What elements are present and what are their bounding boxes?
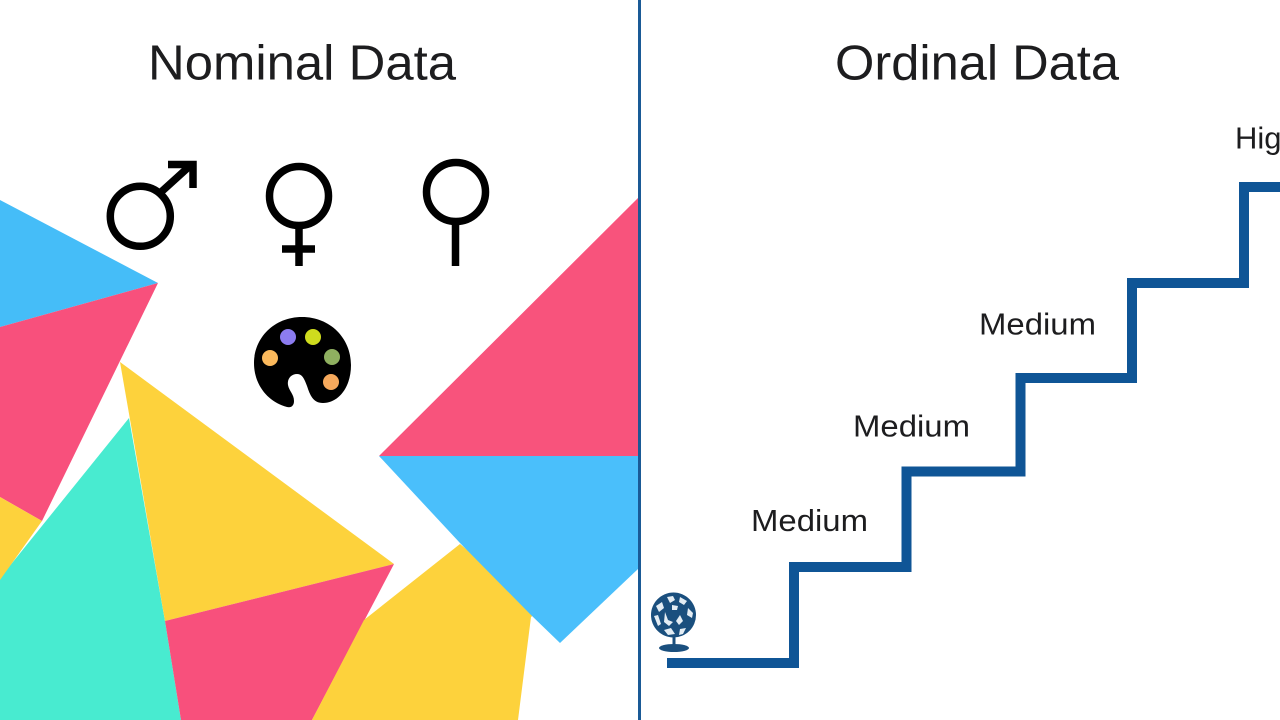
panel: nominal data [0,36,638,720]
heading: ordinal data: Ordinal Data [835,36,1120,90]
icon: globe [651,592,696,652]
icon: female symbol [270,166,328,266]
icon: paint palette [254,317,351,407]
step label: medium 1: Medium [751,503,868,538]
step label: medium 3: Medium [979,306,1096,342]
icon: male symbol [110,164,193,246]
icon: neutral symbol [426,162,486,266]
geometric shapes collage [0,198,638,720]
center divider [638,0,641,720]
panel: ordinal data [651,36,1280,663]
heading: nominal data: Nominal Data [148,36,457,90]
step label: medium 2: Medium [853,408,970,444]
staircase line [667,187,1280,663]
